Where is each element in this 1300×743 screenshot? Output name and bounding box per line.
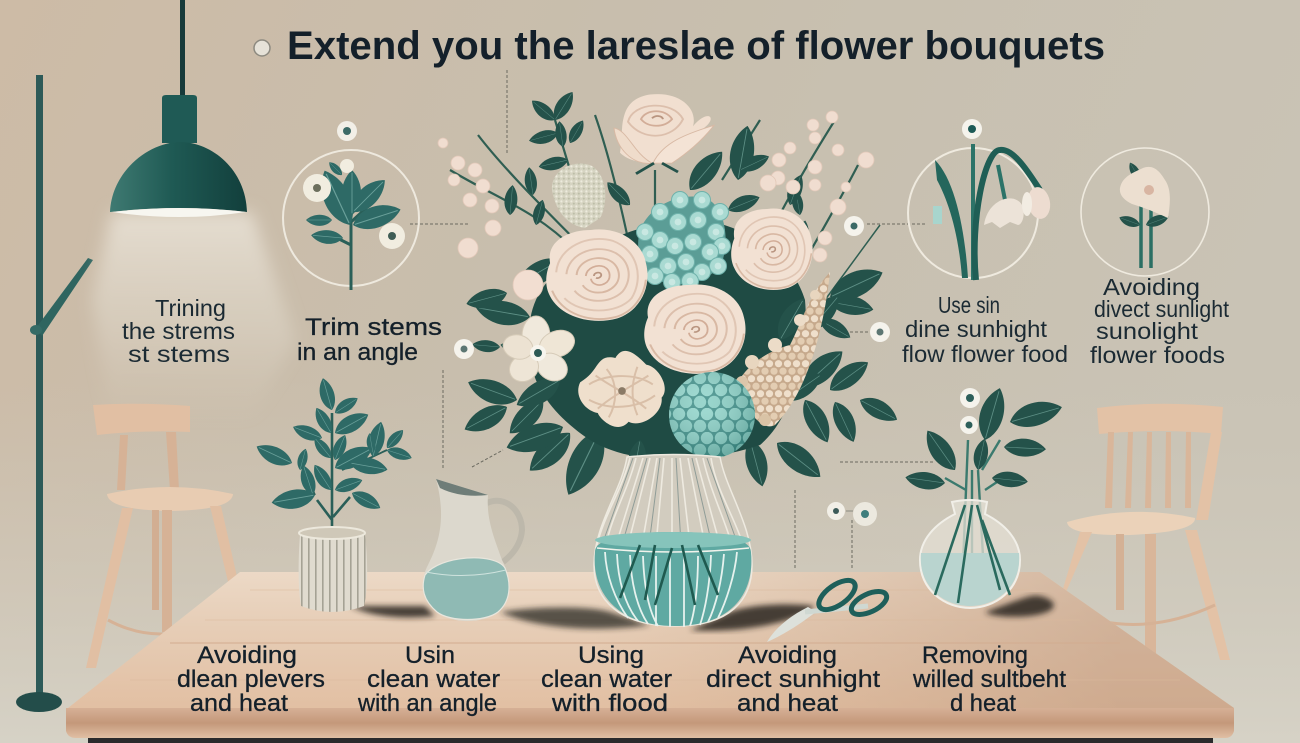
text: use flower food: dine sunhight xyxy=(905,316,1048,342)
bottom label: avoiding direct sunlight xyxy=(706,642,880,717)
icon: lily circle xyxy=(1081,148,1209,276)
white flower xyxy=(500,316,578,387)
text: avoiding direct sunlight: flower foods xyxy=(1090,342,1225,368)
bottom label: clean water with an angle: clean water xyxy=(367,666,500,693)
bottom label: clean water with an angle: Usin xyxy=(405,642,455,669)
bottom label: removing wilted: Removing xyxy=(922,642,1028,669)
title: Extend you the lareslae of flower bouquets xyxy=(287,24,1105,68)
pale buds xyxy=(438,111,874,300)
scissors xyxy=(767,502,890,642)
vase body xyxy=(920,500,1020,608)
bottom label: removing wilted: d heat xyxy=(950,690,1016,717)
text: trim stems: Trim stems xyxy=(305,314,442,341)
dense foliage mass xyxy=(529,220,806,459)
text: avoiding direct sunlight: Avoiding xyxy=(1103,274,1200,300)
vase water xyxy=(595,532,751,627)
text: use flower food xyxy=(902,292,1068,367)
bottom label: avoiding direct sunlight: Avoiding xyxy=(738,642,837,669)
leaves xyxy=(460,88,902,502)
bottom label: using clean water: with flood xyxy=(551,690,668,717)
connector lines xyxy=(410,70,933,570)
floor lamp xyxy=(16,75,93,712)
text: trim stems xyxy=(297,314,442,366)
vase upper glass xyxy=(594,454,752,626)
glass vase with stems xyxy=(904,385,1065,608)
table shadows xyxy=(350,596,1054,631)
left steps text: trimming xyxy=(122,295,235,367)
text: trim stems: in an angle xyxy=(297,339,418,366)
text: use flower food: Use sin xyxy=(938,292,1000,318)
bottom label: using clean water: clean water xyxy=(541,666,672,693)
bottom label: removing wilted xyxy=(912,642,1066,717)
text: avoiding direct sunlight: divect sunlight xyxy=(1094,296,1230,322)
left steps text: trimming: st stems xyxy=(128,341,230,367)
bottom label: avoiding clean pieces: Avoiding xyxy=(197,642,297,669)
icon: trimmed stem circle xyxy=(283,121,419,290)
carnation xyxy=(578,351,665,427)
bottom label: avoiding clean pieces: dlean plevers xyxy=(177,666,325,693)
bottom label: removing wilted: willed sultbeht xyxy=(912,666,1066,693)
main striped vase xyxy=(594,454,752,627)
pot plant xyxy=(253,376,414,612)
bottom label: using clean water xyxy=(541,642,672,717)
bottom label: avoiding clean pieces: and heat xyxy=(190,690,288,717)
bottom label: avoiding direct sunlight: direct sunhight xyxy=(706,666,880,693)
plant pot xyxy=(299,527,367,612)
text: use flower food: flow flower food xyxy=(902,341,1068,367)
annotation dots xyxy=(454,216,890,359)
cream seed spike xyxy=(736,272,830,426)
left chair xyxy=(86,404,240,668)
bottom label: clean water with an angle xyxy=(357,642,500,717)
text: avoiding direct sunlight xyxy=(1090,274,1230,368)
right chair xyxy=(1062,404,1230,660)
teal hydrangea xyxy=(636,192,730,290)
left steps text: trimming: Trining xyxy=(155,295,226,321)
icon: wilting flower circle xyxy=(908,119,1053,280)
bouquet xyxy=(438,88,902,502)
twigs and stems xyxy=(450,115,880,440)
bottom label: avoiding direct sunlight: and heat xyxy=(737,690,838,717)
table xyxy=(66,572,1234,743)
text: avoiding direct sunlight: sunolight xyxy=(1096,318,1199,344)
left steps text: trimming: the strems xyxy=(122,318,235,344)
pendant lamp xyxy=(92,0,296,420)
teal ball flower xyxy=(669,372,755,458)
bottom label: avoiding clean pieces xyxy=(177,642,325,717)
cream roses xyxy=(546,229,648,321)
water jug xyxy=(423,479,522,621)
bottom label: using clean water: Using xyxy=(578,642,644,669)
bottom label: clean water with an angle: with an angle xyxy=(357,690,497,717)
fuzzy white bloom xyxy=(552,163,605,228)
top rose xyxy=(614,94,714,174)
